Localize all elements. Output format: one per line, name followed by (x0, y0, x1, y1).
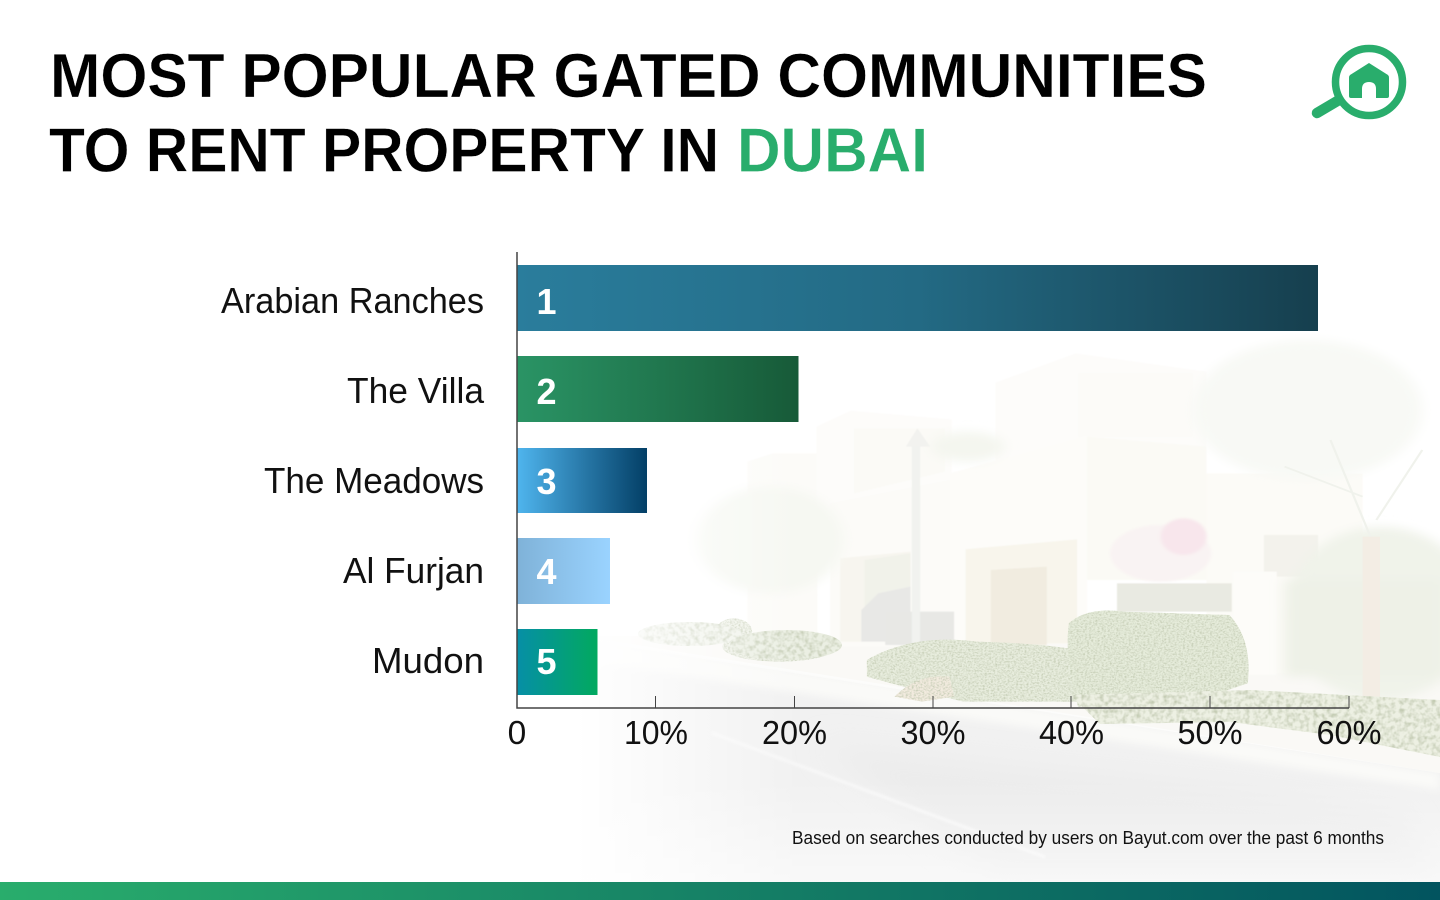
fade overlays (575, 220, 800, 882)
bar: Al Furjan, rank 4: Al Furjan (343, 550, 484, 591)
title: MOST POPULAR GATED COMMUNITIES (50, 42, 1207, 111)
x-axis labels: 60% (1316, 715, 1382, 752)
bar: The Meadows, rank 3 (264, 448, 647, 513)
bar: Arabian Ranches, rank 1: 1 (536, 281, 557, 322)
title (49, 42, 1207, 186)
footer gradient strip (0, 882, 1440, 900)
roadside grass and hedges (638, 622, 1440, 757)
x-axis labels: 10% (624, 715, 688, 752)
bar: The Villa, rank 2: 2 (536, 371, 557, 412)
background photo: faded villas and street (575, 220, 1440, 882)
bar: Al Furjan, rank 4 (343, 538, 610, 604)
pavement and road (580, 640, 1440, 882)
bar: Al Furjan, rank 4: 4 (536, 551, 557, 592)
bar: The Meadows, rank 3: The Meadows (264, 460, 484, 501)
bar: Mudon, rank 5: 5 (536, 641, 557, 682)
x-axis labels: 0 (508, 715, 526, 752)
bar: Mudon, rank 5 (372, 629, 598, 695)
bar: Mudon, rank 5: Mudon (372, 640, 484, 681)
bar chart: share of searches by community (221, 252, 1382, 752)
bar: The Villa, rank 2 (347, 356, 798, 422)
x-axis labels: 30% (900, 715, 966, 752)
title: DUBAI (737, 116, 928, 186)
x-axis labels: 50% (1178, 715, 1242, 752)
x-axis labels (508, 715, 1382, 752)
bar: Arabian Ranches, rank 1 (221, 265, 1318, 331)
title: TO RENT PROPERTY IN (49, 116, 719, 186)
source note: Based on searches conducted by users on Bayut.com over the past 6 months (792, 828, 1384, 848)
icon: magnifying glass with house logo (1317, 48, 1402, 116)
bar: The Villa, rank 2: The Villa (347, 370, 485, 411)
bar: Arabian Ranches, rank 1: Arabian Ranches (221, 280, 484, 321)
bar: The Meadows, rank 3: 3 (536, 461, 557, 502)
chart axes with tick marks (517, 252, 1349, 708)
x-axis labels: 40% (1039, 715, 1104, 752)
x-axis labels: 20% (762, 715, 827, 752)
